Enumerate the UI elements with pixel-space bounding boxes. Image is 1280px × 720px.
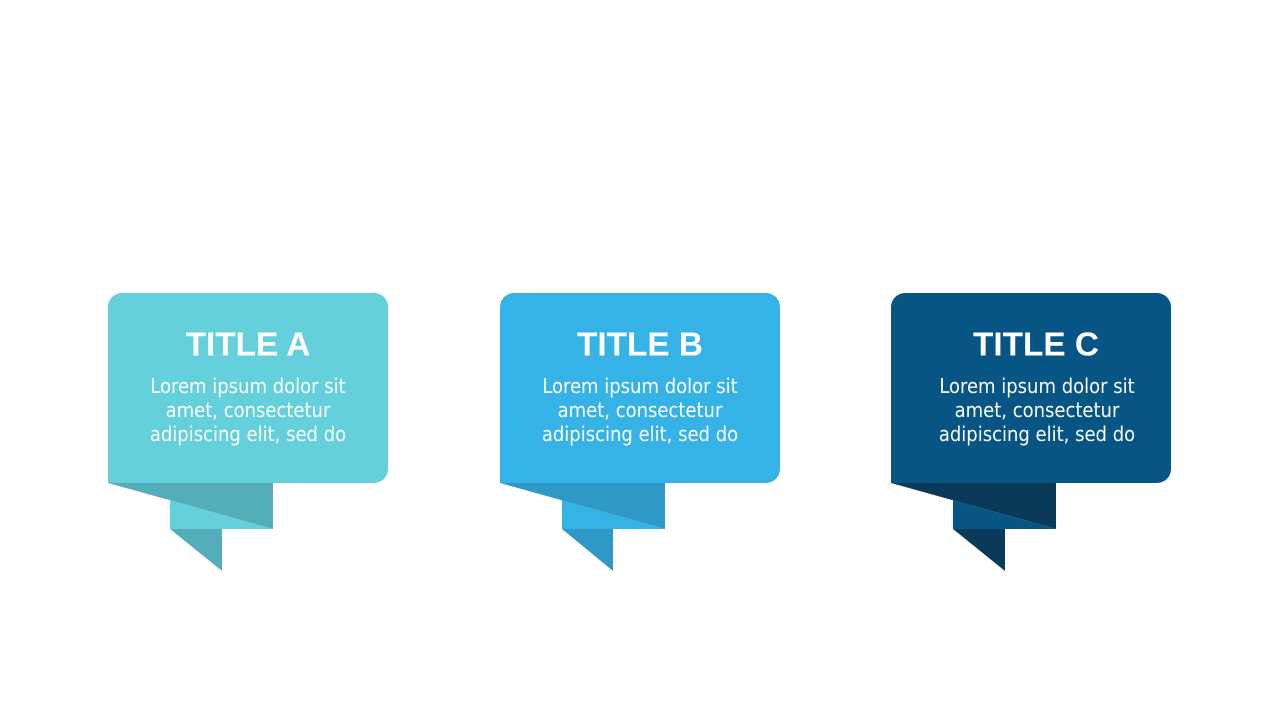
card body: card A (108, 293, 388, 483)
text block: card A (150, 374, 346, 446)
ribbon fold: card C (891, 483, 1056, 571)
heading: title C: TITLE C (973, 326, 1099, 364)
text block: card A: adipiscing elit, sed do (150, 422, 346, 446)
ribbon fold: card B (500, 483, 665, 571)
text block: card C: adipiscing elit, sed do (939, 422, 1135, 446)
text block: card B: adipiscing elit, sed do (542, 422, 738, 446)
panel: card B (500, 293, 780, 571)
text block: card C: Lorem ipsum dolor sit (939, 374, 1135, 398)
heading: title A: TITLE A (186, 326, 310, 364)
text block: card C: amet, consectetur (955, 398, 1120, 422)
text block: card B: Lorem ipsum dolor sit (542, 374, 738, 398)
text block: card B (542, 374, 738, 446)
card body: card C (891, 293, 1171, 483)
ribbon fold: card A (108, 483, 273, 571)
card body: card B (500, 293, 780, 483)
heading: title B: TITLE B (577, 326, 703, 364)
text block: card B: amet, consectetur (558, 398, 723, 422)
panel: card A (108, 293, 388, 571)
panel: card C (891, 293, 1171, 571)
text block: card C (939, 374, 1135, 446)
text block: card A: amet, consectetur (166, 398, 331, 422)
text block: card A: Lorem ipsum dolor sit (150, 374, 346, 398)
